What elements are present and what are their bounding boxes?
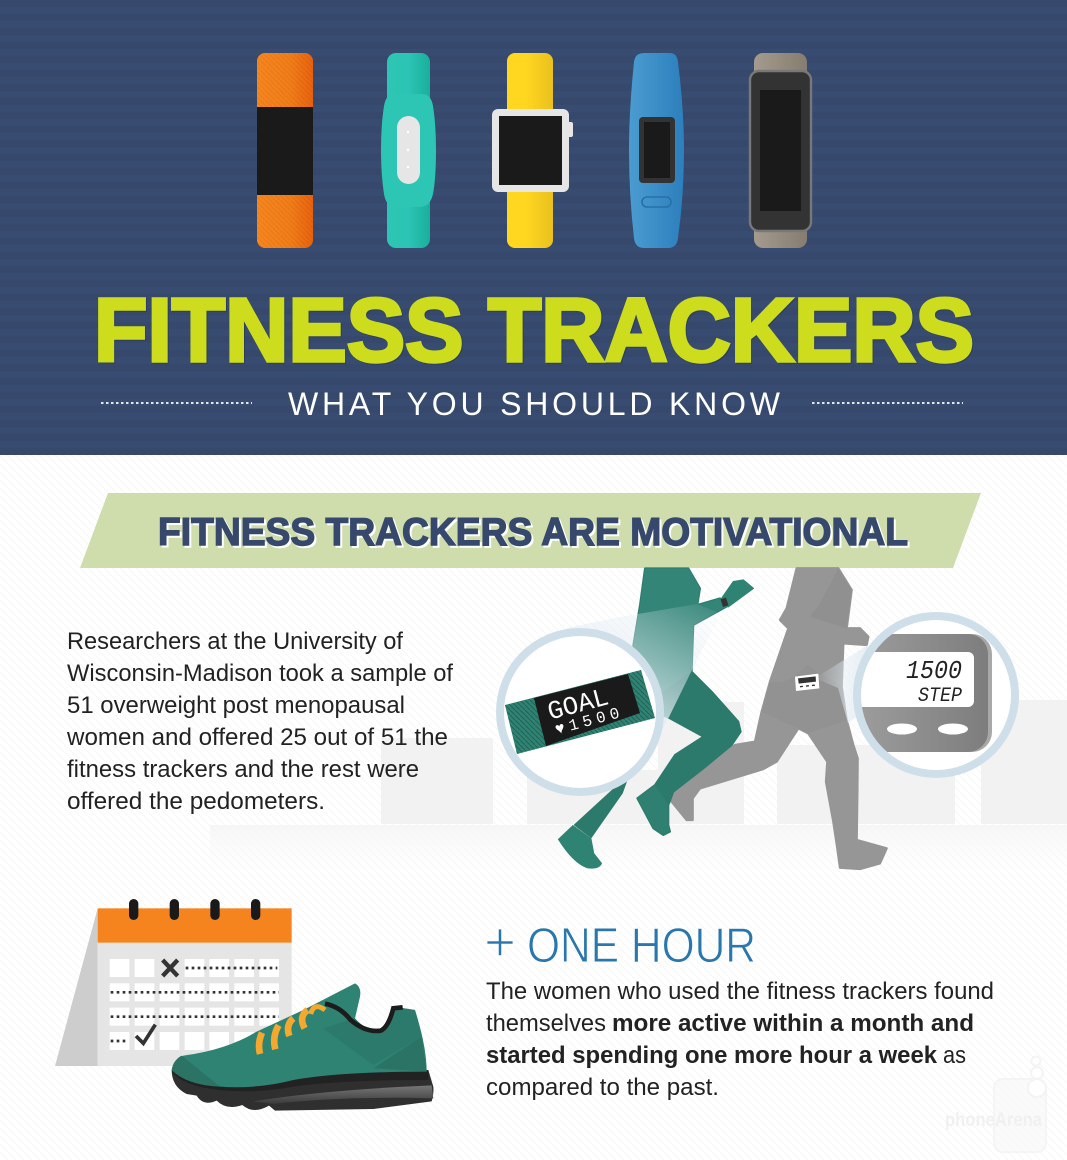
magnifier: fitness band goal: GOAL: [544, 682, 612, 727]
research paragraph: offered the pedometers.: [67, 788, 325, 815]
one hour paragraph: started spending one more hour a week: [486, 1042, 938, 1069]
body and front leg: [633, 568, 753, 835]
tracker: orange band: [257, 53, 313, 248]
calendar: [55, 899, 292, 1066]
watermark: phoneArena: [945, 1110, 1042, 1131]
section banner: FITNESS TRACKERS ARE MOTIVATIONAL: [160, 513, 910, 556]
research paragraph: Researchers at the University of: [67, 628, 403, 655]
shoe laces: [259, 1007, 325, 1054]
one hour paragraph: compared to the past.: [486, 1074, 719, 1101]
one hour paragraph: [486, 978, 994, 1101]
research paragraph: fitness trackers and the rest were: [67, 756, 419, 783]
back leg and foot: [558, 773, 630, 869]
magnifier: pedometer step count: [840, 616, 1015, 774]
one hour heading: ONE HOUR: [527, 919, 756, 973]
watermark: [945, 1056, 1046, 1152]
hand: [722, 580, 753, 607]
subtitle: WHAT YOU SHOULD KNOW: [288, 386, 781, 422]
city skyline background: [210, 700, 1067, 873]
magnifier: fitness band goal: ♥1500: [553, 705, 622, 739]
shoe collar: [325, 1004, 403, 1031]
research paragraph: Wisconsin-Madison took a sample of: [67, 660, 453, 687]
section banner: FITNESS TRACKERS ARE MOTIVATIONAL: [158, 511, 908, 554]
shoe upper: [172, 983, 427, 1087]
grey runner: [672, 568, 887, 869]
one hour paragraph: themselves: [486, 1010, 606, 1037]
section banner: [80, 493, 981, 568]
one hour paragraph: more active within a month and: [612, 1010, 974, 1037]
magnifier: pedometer step count: 1500: [906, 656, 962, 686]
research paragraph: women and offered 25 out of 51 the: [66, 724, 448, 751]
research paragraph: 51 overweight post menopausal: [67, 692, 405, 719]
research paragraph: [66, 628, 453, 815]
magnifier beam: pedometer: [815, 645, 880, 723]
magnifier: pedometer step count: STEP: [918, 685, 962, 708]
tracker: teal band: [381, 53, 436, 248]
tracker: blue band: [629, 53, 684, 248]
small pedometer on waist: [795, 674, 819, 691]
header band: [0, 0, 1067, 455]
tracker: grey band: [750, 53, 811, 248]
one hour heading: +: [484, 910, 516, 973]
shoe sole: [172, 1070, 433, 1111]
one hour paragraph: as: [943, 1042, 966, 1069]
running shoe: [172, 983, 433, 1111]
title shadow: FITNESS TRACKERS: [95, 282, 975, 382]
wristband: [721, 598, 728, 607]
magnifier: fitness band goal: [500, 632, 660, 792]
tracker: yellow watch: [492, 53, 573, 248]
main title: FITNESS TRACKERS: [94, 281, 974, 381]
magnifier beam: wrist band: [566, 604, 717, 770]
green runner: [558, 568, 753, 869]
one hour heading: [484, 910, 756, 973]
one hour paragraph: The women who used the fitness trackers found: [486, 978, 994, 1005]
